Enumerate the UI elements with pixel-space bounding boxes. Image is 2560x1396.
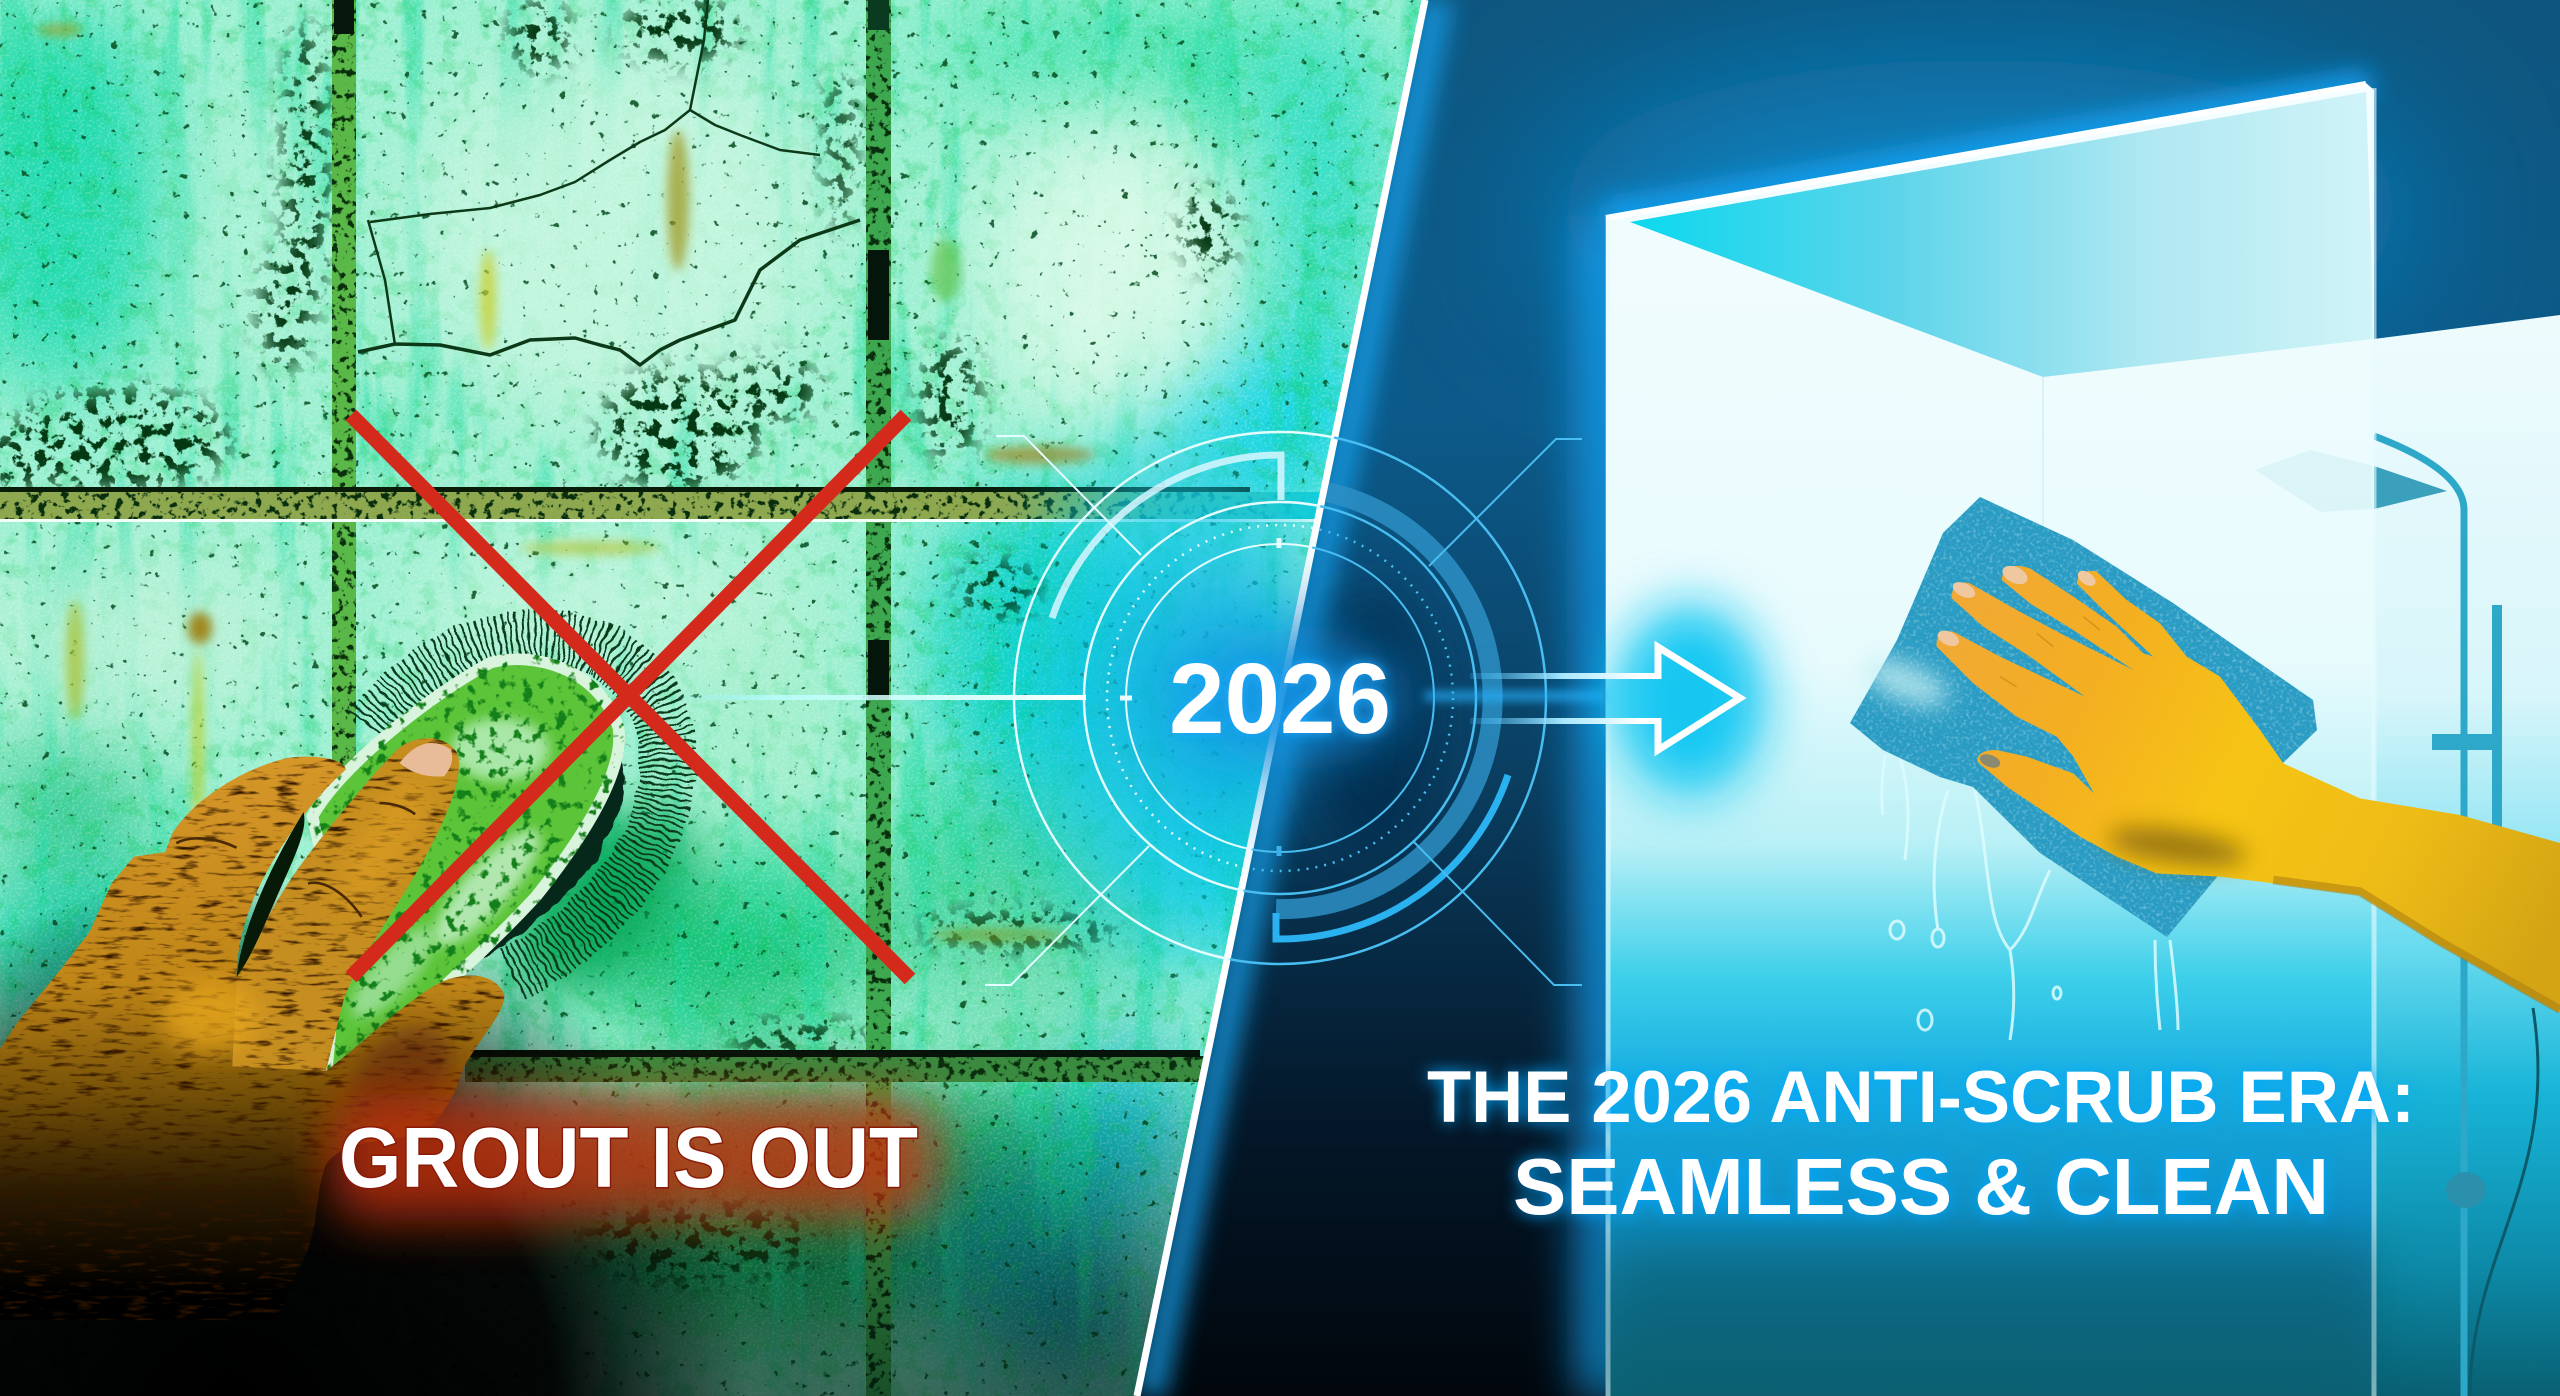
centre glow xyxy=(1120,588,1340,808)
grout line: lower horizontal xyxy=(465,1056,1205,1082)
illustration: scrubbing hand and brush xyxy=(0,639,718,1320)
heading: the 2026 anti-scrub era xyxy=(1427,1057,2415,1231)
brush body xyxy=(313,659,619,1080)
shower fixture xyxy=(2374,436,2538,1396)
hand silhouette xyxy=(0,757,504,1320)
knuckle creases xyxy=(176,803,415,917)
connector line from old to new xyxy=(670,692,1605,700)
index finger xyxy=(232,738,459,1071)
arrow pointing to clean shower xyxy=(1470,605,1765,795)
wall mount xyxy=(2446,1172,2486,1208)
hand xyxy=(0,738,504,1320)
nails xyxy=(1935,562,2098,770)
dark inner disc on right side xyxy=(1310,590,1430,850)
thick band arc xyxy=(1276,492,1493,909)
vertical drip streaks xyxy=(0,0,1440,1050)
door ceiling plane xyxy=(1630,92,2374,377)
sparse mold speckles xyxy=(0,0,1440,1396)
white arc upper left xyxy=(1052,455,1281,618)
crosshair leaders xyxy=(985,436,1582,985)
arm lower shade xyxy=(2273,880,2560,1010)
dark corner vignette xyxy=(0,870,760,1396)
cloth pale fold xyxy=(1856,648,1954,716)
blue arc lower right xyxy=(1276,775,1508,939)
slide bar xyxy=(2492,605,2502,830)
fingernail xyxy=(400,743,452,777)
light grain xyxy=(0,0,1440,1396)
knuckle highlight xyxy=(161,982,259,1053)
glow over shower door top xyxy=(1606,83,2370,216)
ticks xyxy=(1120,538,1279,856)
blue glow above the shower xyxy=(1540,60,2420,360)
bracket xyxy=(2432,734,2502,750)
line one: THE 2026 ANTI-SCRUB ERA: xyxy=(1427,1057,2415,1138)
hand shading xyxy=(161,743,471,1145)
door bottom darkening xyxy=(1606,1240,2374,1396)
arrow head outline xyxy=(1658,647,1740,750)
hand and arm silhouette xyxy=(1937,566,2560,1013)
line two: SEAMLESS & CLEAN xyxy=(1513,1142,2329,1231)
heading: grout is out: GROUT IS OUT xyxy=(339,1111,918,1206)
rings xyxy=(1126,544,1434,852)
door side edges xyxy=(1608,88,2374,1396)
brush shadow xyxy=(482,778,718,1022)
wrist shadow xyxy=(2105,821,2248,872)
red cross-out mark xyxy=(351,415,910,979)
diagonal divider line xyxy=(1137,0,1425,1396)
microfibre cloth xyxy=(1850,497,2317,937)
grout line: vertical right xyxy=(866,0,891,1396)
tile colour patches xyxy=(0,0,1400,1390)
pale patches xyxy=(451,718,549,781)
door top edge highlight xyxy=(1606,84,2366,218)
glow along diagonal edge xyxy=(1150,0,1438,1396)
label glow: grout is out xyxy=(330,1095,940,1220)
cracks in centre tile xyxy=(358,0,860,365)
brush bristles xyxy=(372,639,668,975)
label: 2026: 2026 xyxy=(1169,643,1391,755)
reflected shower head xyxy=(2255,450,2374,512)
water drips xyxy=(1882,755,2178,1040)
finger creases xyxy=(2000,617,2100,687)
thumb shade xyxy=(332,1006,471,1145)
hose xyxy=(2470,1008,2538,1396)
panel: dirty grout tile wall xyxy=(0,0,1440,1396)
shower head xyxy=(2374,466,2447,509)
pale clean tile areas xyxy=(0,40,1240,1010)
dense mold clusters xyxy=(0,0,1256,1294)
bottom shadow xyxy=(0,1080,1440,1396)
cyan haze near the centre xyxy=(1030,450,1330,950)
panel: bright shower background xyxy=(1130,0,2560,1396)
rust and olive stains xyxy=(38,24,1095,942)
clean hand and arm xyxy=(1935,562,2560,1013)
glow left of shower door xyxy=(1583,216,1629,1396)
arrow head fill xyxy=(1606,647,1740,750)
index finger highlight xyxy=(327,766,441,920)
wall corner edge xyxy=(2042,377,2044,540)
riser pipe xyxy=(2374,436,2464,1396)
brush handle outline xyxy=(313,659,619,1080)
soft moss clouds xyxy=(0,0,1440,1396)
gap between fingers xyxy=(237,812,304,977)
inner glow behind year xyxy=(1200,643,1400,753)
shower door panel xyxy=(1606,83,2374,1396)
grout line: upper horizontal xyxy=(0,492,1320,520)
central 2026 HUD target xyxy=(985,432,1582,985)
arrow shaft xyxy=(1470,676,1655,721)
arrow glow xyxy=(1615,605,1765,795)
right side shower wall xyxy=(2374,315,2560,1396)
grout line: vertical left xyxy=(332,0,356,1060)
grout fade into haze xyxy=(1020,492,1320,519)
